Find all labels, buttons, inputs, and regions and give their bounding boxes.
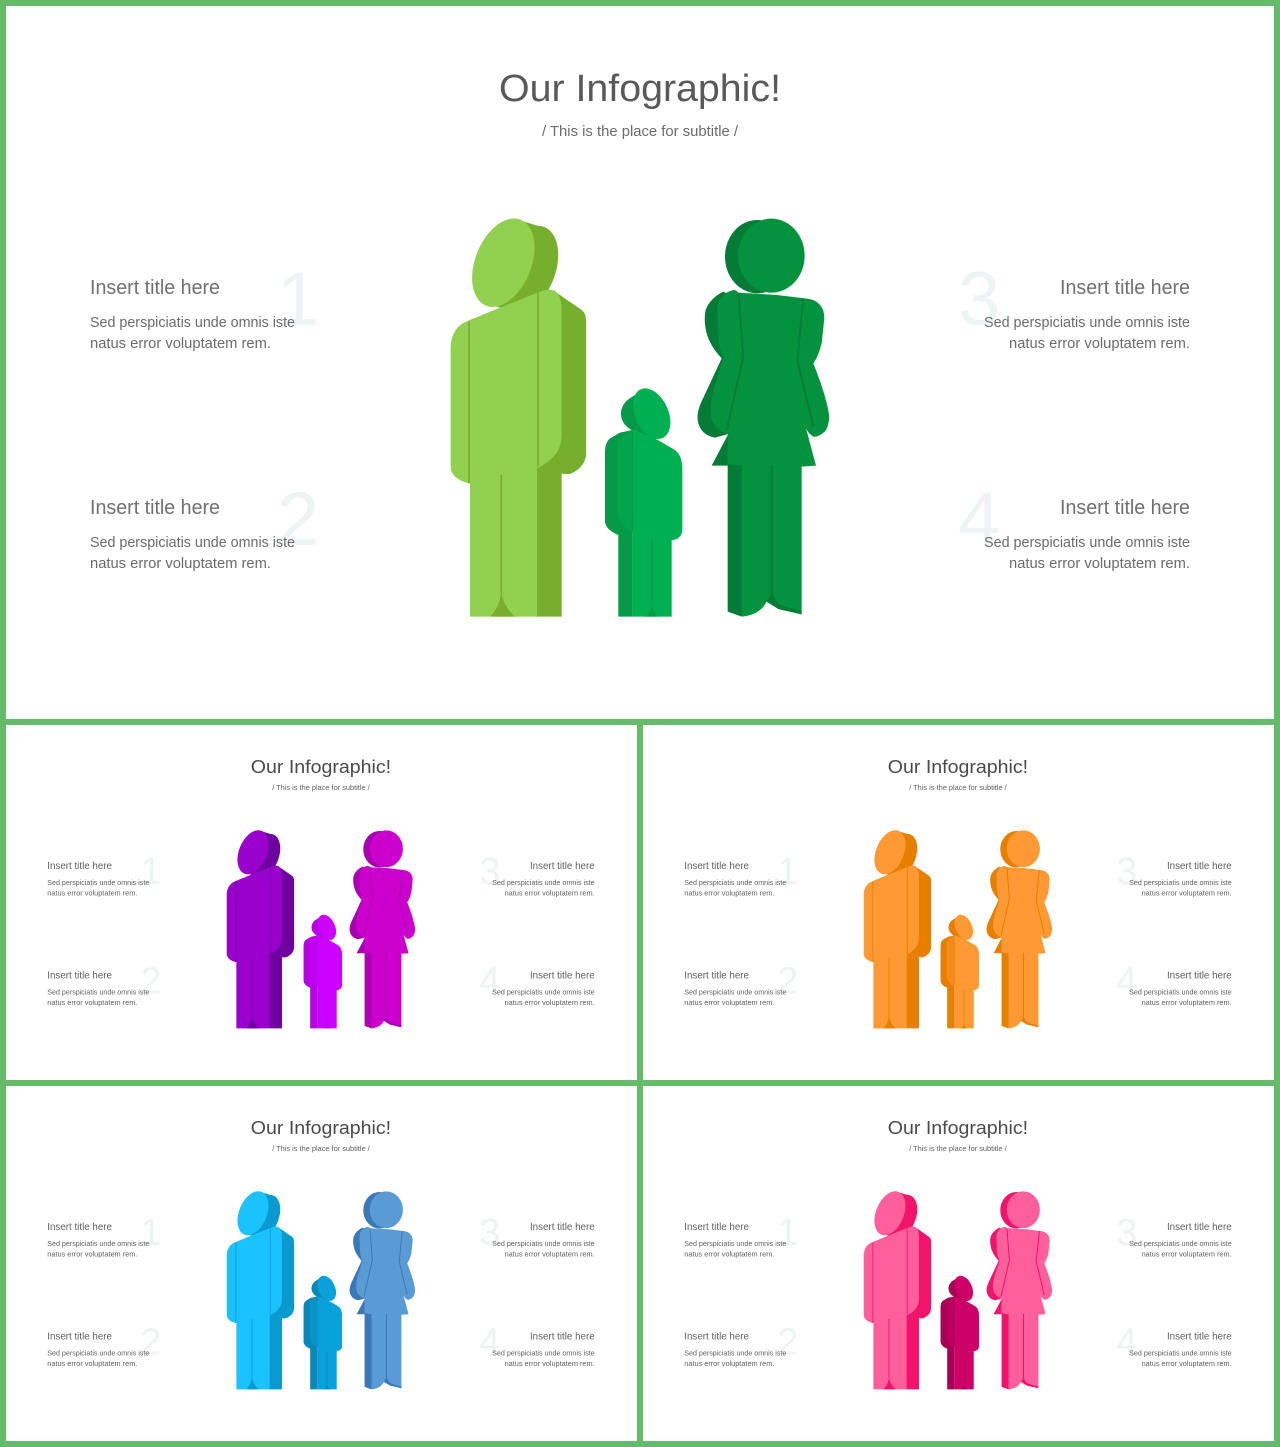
item 1: natus error voluptatem rem.	[47, 1250, 137, 1259]
item 1: Sed perspiciatis unde omnis iste	[47, 878, 149, 887]
item 3: Insert title here	[1167, 861, 1232, 872]
family figures	[451, 209, 829, 617]
item 3: Sed perspiciatis unde omnis iste	[1129, 878, 1232, 887]
family figures	[864, 826, 1052, 1028]
item 4: Insert title here	[1060, 497, 1190, 519]
panel: blue slide	[6, 1086, 637, 1441]
item 4: Insert title here	[530, 970, 595, 981]
item 1	[47, 1212, 161, 1259]
item 2: Insert title here	[684, 1331, 749, 1342]
item 2	[47, 1322, 161, 1368]
panel: purple slide	[6, 725, 637, 1080]
item 2	[684, 1322, 798, 1368]
item 4: Sed perspiciatis unde omnis iste	[492, 988, 595, 997]
item 4: Sed perspiciatis unde omnis iste	[1129, 988, 1232, 997]
item 2: natus error voluptatem rem.	[90, 555, 271, 572]
panel: main green slide	[6, 6, 1274, 719]
item 3: Insert title here	[1167, 1222, 1232, 1233]
item 1: natus error voluptatem rem.	[684, 889, 774, 898]
item 3	[479, 1212, 595, 1259]
item 1: Sed perspiciatis unde omnis iste	[684, 1239, 786, 1248]
item 2	[90, 477, 319, 572]
item 4: Sed perspiciatis unde omnis iste	[1129, 1349, 1232, 1358]
item 2: Sed perspiciatis unde omnis iste	[47, 988, 149, 997]
item 3: Sed perspiciatis unde omnis iste	[492, 878, 595, 887]
item 4: natus error voluptatem rem.	[505, 998, 595, 1007]
item 3: natus error voluptatem rem.	[505, 889, 595, 898]
item 2: Insert title here	[47, 1331, 112, 1342]
item 2: 2	[140, 1322, 161, 1364]
item 1: 1	[777, 1212, 798, 1254]
family figures	[864, 1187, 1052, 1389]
item 2	[684, 961, 798, 1007]
panel: pink slide	[643, 1086, 1274, 1441]
item 4: natus error voluptatem rem.	[1142, 998, 1232, 1007]
subtitle: / This is the place for subtitle /	[272, 1144, 371, 1153]
item 4	[479, 961, 595, 1007]
item 3: 3	[479, 851, 500, 893]
heading: Our Infographic!	[499, 68, 781, 110]
item 2: Sed perspiciatis unde omnis iste	[47, 1349, 149, 1358]
item 4	[1116, 961, 1232, 1007]
item 4: 4	[479, 961, 500, 1003]
item 1: Sed perspiciatis unde omnis iste	[684, 878, 786, 887]
item 1: Insert title here	[47, 1222, 112, 1233]
item 1	[684, 1212, 798, 1259]
item 4: 4	[1116, 1322, 1137, 1364]
item 3: natus error voluptatem rem.	[1009, 335, 1190, 352]
item 4: natus error voluptatem rem.	[505, 1359, 595, 1368]
item 4: Sed perspiciatis unde omnis iste	[492, 1349, 595, 1358]
item 1	[90, 257, 319, 352]
item 2: Insert title here	[47, 970, 112, 981]
item 1: 1	[140, 1212, 161, 1254]
item 2: Insert title here	[684, 970, 749, 981]
item 3: 3	[1116, 1212, 1137, 1254]
item 3	[479, 851, 595, 898]
item 3: 3	[1116, 851, 1137, 893]
item 4: 4	[479, 1322, 500, 1364]
item 2: Insert title here	[90, 497, 220, 519]
panel: orange slide	[643, 725, 1274, 1080]
item 3	[1116, 1212, 1232, 1259]
item 3: Sed perspiciatis unde omnis iste	[984, 314, 1190, 331]
item 1	[47, 851, 161, 898]
item 1: Insert title here	[47, 861, 112, 872]
item 3	[958, 257, 1190, 352]
item 1: 1	[277, 257, 319, 342]
item 1: Sed perspiciatis unde omnis iste	[47, 1239, 149, 1248]
item 1: 1	[777, 851, 798, 893]
heading: Our Infographic!	[888, 757, 1028, 778]
item 4	[1116, 1322, 1232, 1368]
item 3: natus error voluptatem rem.	[505, 1250, 595, 1259]
item 2: natus error voluptatem rem.	[684, 1359, 774, 1368]
item 4	[958, 477, 1190, 572]
item 4: Insert title here	[1167, 970, 1232, 981]
item 4: Insert title here	[530, 1331, 595, 1342]
item 3: Sed perspiciatis unde omnis iste	[492, 1239, 595, 1248]
item 3: natus error voluptatem rem.	[1142, 889, 1232, 898]
subtitle: / This is the place for subtitle /	[909, 783, 1008, 792]
item 1: Insert title here	[684, 1222, 749, 1233]
item 4: natus error voluptatem rem.	[1142, 1359, 1232, 1368]
item 3: 3	[479, 1212, 500, 1254]
item 1: 1	[140, 851, 161, 893]
family figures	[227, 826, 415, 1028]
item 3: natus error voluptatem rem.	[1142, 1250, 1232, 1259]
item 2: natus error voluptatem rem.	[47, 998, 137, 1007]
item 4: 4	[1116, 961, 1137, 1003]
item 4	[479, 1322, 595, 1368]
item 2: Sed perspiciatis unde omnis iste	[684, 988, 786, 997]
family figures	[227, 1187, 415, 1389]
item 1: Insert title here	[90, 277, 220, 299]
item 4: 4	[958, 477, 1000, 562]
subtitle: / This is the place for subtitle /	[272, 783, 371, 792]
item 3: Insert title here	[530, 861, 595, 872]
item 1: natus error voluptatem rem.	[90, 335, 271, 352]
item 3: Insert title here	[530, 1222, 595, 1233]
item 1: Insert title here	[684, 861, 749, 872]
item 3: Sed perspiciatis unde omnis iste	[1129, 1239, 1232, 1248]
item 1	[684, 851, 798, 898]
item 4: natus error voluptatem rem.	[1009, 555, 1190, 572]
item 1: natus error voluptatem rem.	[47, 889, 137, 898]
heading: Our Infographic!	[888, 1118, 1028, 1139]
heading: Our Infographic!	[251, 1118, 391, 1139]
item 2: 2	[277, 477, 319, 562]
item 2: natus error voluptatem rem.	[684, 998, 774, 1007]
item 3: 3	[958, 257, 1000, 342]
subtitle: / This is the place for subtitle /	[909, 1144, 1008, 1153]
item 3	[1116, 851, 1232, 898]
item 1: natus error voluptatem rem.	[684, 1250, 774, 1259]
item 2: 2	[140, 961, 161, 1003]
item 2: natus error voluptatem rem.	[47, 1359, 137, 1368]
heading: Our Infographic!	[251, 757, 391, 778]
item 2	[47, 961, 161, 1007]
subtitle: / This is the place for subtitle /	[542, 123, 739, 140]
item 2: 2	[777, 1322, 798, 1364]
item 2: Sed perspiciatis unde omnis iste	[90, 534, 295, 551]
item 1: Sed perspiciatis unde omnis iste	[90, 314, 295, 331]
item 2: 2	[777, 961, 798, 1003]
item 4: Insert title here	[1167, 1331, 1232, 1342]
item 4: Sed perspiciatis unde omnis iste	[984, 534, 1190, 551]
item 3: Insert title here	[1060, 277, 1190, 299]
item 2: Sed perspiciatis unde omnis iste	[684, 1349, 786, 1358]
